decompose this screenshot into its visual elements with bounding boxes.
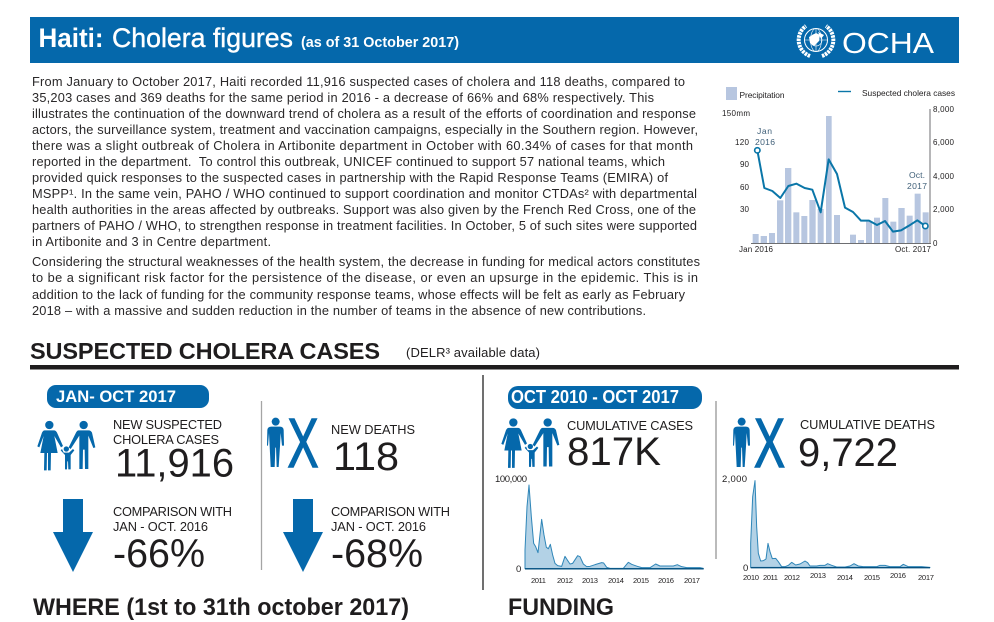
title (38, 23, 459, 53)
right axis labels: 0 (933, 239, 938, 248)
left axis labels: 90 (740, 160, 750, 169)
icon: person and X: X (288, 404, 318, 482)
stat: cumulative deaths (798, 417, 935, 475)
stat: cumulative deaths: CUMULATIVE DEATHS (800, 417, 935, 432)
area chart: cumulative cases (495, 474, 704, 585)
text block: intro paragraph: illustrates the continuation of the downward trend of cholera as a result of the efforts of coordination and response (32, 106, 696, 121)
left axis labels: Jan 2016 (739, 245, 774, 254)
stat: new suspected cases: CHOLERA CASES (113, 432, 219, 447)
area chart: cumulative deaths: 2016 (890, 571, 906, 580)
text block: intro paragraph: reported in the department. To control this outbreak, UNICEF continued to support 57 national teams, which (32, 154, 665, 169)
area chart: cumulative deaths: 2014 (837, 573, 853, 582)
line: suspected cholera cases (755, 148, 928, 232)
area chart: cumulative deaths: 2013 (810, 571, 826, 580)
icon: person and X: X (754, 404, 785, 482)
area chart: cumulative cases: 2015 (633, 576, 649, 585)
text block: intro paragraph: there was a slight outbreak of Cholera in Artibonite department in October with 60.34% of cases for that month (32, 138, 693, 153)
stat: new deaths: 118 (333, 435, 399, 479)
section rule (30, 365, 959, 370)
title: (as of 31 October 2017) (301, 34, 459, 51)
stat: comparison deaths: COMPARISON WITH (331, 504, 450, 519)
left axis labels: 60 (740, 183, 750, 192)
stat: new suspected cases (113, 417, 234, 486)
area chart: cumulative cases: 2012 (557, 576, 573, 585)
pill heading (47, 385, 209, 408)
text block: funding paragraph (32, 254, 700, 318)
legend: Suspected cholera cases (862, 88, 955, 98)
stat: new deaths: NEW DEATHS (331, 422, 415, 437)
area chart: cumulative cases: 100,000 (495, 474, 527, 485)
stat: comparison cases: COMPARISON WITH (113, 504, 232, 519)
heading: where: WHERE (1st to 31th october 2017) (33, 594, 409, 621)
right axis labels: 4,000 (933, 172, 955, 181)
icon: person and X (733, 404, 785, 482)
stat: comparison deaths (331, 504, 450, 576)
arrow: down comparison deaths (283, 499, 323, 572)
annotations: Jan (757, 126, 772, 136)
area chart: cumulative deaths: 2012 (784, 573, 800, 582)
right axis labels (933, 105, 955, 248)
left axis labels: Oct. 2017 (895, 245, 932, 254)
stat: comparison cases (113, 504, 232, 576)
area chart: cumulative deaths: 2010 (743, 573, 759, 582)
legend: Precipitation (740, 90, 785, 100)
stat: new suspected cases: 11,916 (115, 442, 234, 486)
icon: family (501, 418, 559, 468)
stat: comparison deaths: JAN - OCT. 2016 (331, 519, 426, 534)
annotations: 2017 (907, 181, 927, 191)
left axis labels: 30 (740, 205, 750, 214)
stat: cumulative cases: CUMULATIVE CASES (567, 418, 693, 433)
chart: precipitation and suspected cholera cases (722, 87, 955, 254)
title: Cholera figures (112, 23, 293, 53)
heading: suspected cholera cases (30, 338, 540, 364)
area chart: cumulative deaths: 2,000 (722, 474, 747, 485)
area chart: cumulative deaths: 2015 (864, 573, 880, 582)
stat: new suspected cases: NEW SUSPECTED (113, 417, 222, 432)
icon: UN emblem (799, 26, 833, 56)
annotations: Oct. (909, 170, 925, 180)
area chart: cumulative deaths: 0 (743, 563, 748, 574)
text block: intro paragraph: 35,203 cases and 369 deaths for the same period in 2016 - a decrease of 66% and 68% respectively. This (32, 90, 654, 105)
annotations: 2016 (755, 137, 775, 147)
text block: intro paragraph: actors, the surveillance system, treatment and vaccination campaigns, especially in the Southern region. However, (32, 122, 698, 137)
area chart: cumulative cases: 2013 (582, 576, 598, 585)
legend (726, 87, 955, 100)
axes (751, 109, 931, 244)
area chart: cumulative cases: 2014 (608, 576, 624, 585)
text block: funding paragraph: Considering the structural weaknesses of the health system, the decrease in funding for medical actors constitutes (32, 254, 700, 269)
right axis labels: 8,000 (933, 105, 955, 114)
text block: intro paragraph: From January to October 2017, Haiti recorded 11,916 suspected cases of cholera and 118 deaths, compared to (32, 74, 685, 89)
annotations (755, 126, 927, 191)
left axis labels (722, 109, 932, 254)
heading: funding: FUNDING (508, 594, 614, 621)
text block: intro paragraph: provided quick responses to the suspected cases in partnership with the Rapid Response Teams (EMIRA) of (32, 170, 668, 185)
right axis labels: 6,000 (933, 138, 955, 147)
left axis labels: 150mm (722, 109, 750, 118)
OCHA wordmark: OCHA (842, 28, 935, 60)
arrow: down comparison cases (53, 499, 93, 572)
text block: funding paragraph: 2018 – with a massive and sudden reduction in the number of teams in the absence of new contributions. (32, 303, 646, 318)
heading: suspected cholera cases: (DELR³ available data) (406, 345, 540, 360)
area chart: cumulative deaths (722, 474, 934, 582)
stat: cumulative deaths: 9,722 (798, 431, 898, 475)
text block: intro paragraph: in Artibonite and 3 in Centre department. (32, 234, 271, 249)
area chart: cumulative cases: 2016 (658, 576, 674, 585)
stat: comparison deaths: -68% (331, 532, 423, 576)
text block: funding paragraph: to be a significant risk factor for the persistence of the disease, or even an upsurge in the epidemic. This is in (32, 270, 698, 285)
left axis labels: 120 (735, 138, 750, 147)
panel: Oct 2010-Oct 2017 (495, 386, 935, 585)
icon: family (37, 421, 95, 470)
stat: comparison cases: -66% (113, 532, 205, 576)
text block: funding paragraph: addition to the lack of funding for the community response teams, whose effects will be felt as early as February (32, 287, 686, 302)
area chart: cumulative deaths: 2017 (918, 573, 934, 582)
bars: precipitation (753, 116, 929, 243)
stat: comparison cases: JAN - OCT. 2016 (113, 519, 208, 534)
area chart: cumulative deaths: 2011 (763, 573, 778, 582)
text block: intro paragraph: MSPP¹. In the same vein, PAHO / WHO continued to support coordination and monitor CTDAs² with departmental (32, 186, 697, 201)
area chart: cumulative cases: 0 (516, 564, 521, 575)
text block: intro paragraph: partners of PAHO / WHO, to strengthen response in treatment facilities. In October, 5 of such sites were supported (32, 218, 697, 233)
text block: intro paragraph (32, 74, 698, 249)
right axis labels: 2,000 (933, 205, 955, 214)
text block: intro paragraph: health authorities in the areas affected by outbreaks. Support was also given by the French Red Cross, one of the (32, 202, 696, 217)
icon: person and X (267, 404, 318, 482)
stat: new deaths (331, 422, 415, 479)
pill heading: OCT 2010 - OCT 2017 (511, 387, 679, 407)
stat: cumulative cases (567, 418, 693, 474)
pill heading: JAN- OCT 2017 (56, 387, 176, 406)
panel: Jan-Oct 2017 (37, 385, 450, 576)
title: Haiti: (38, 23, 104, 53)
area chart: cumulative cases: 2011 (531, 576, 546, 585)
heading: suspected cholera cases: SUSPECTED CHOLERA CASES (30, 338, 380, 364)
stat: cumulative cases: 817K (567, 430, 661, 474)
header band (30, 17, 959, 63)
area chart: cumulative cases: 2017 (684, 576, 700, 585)
